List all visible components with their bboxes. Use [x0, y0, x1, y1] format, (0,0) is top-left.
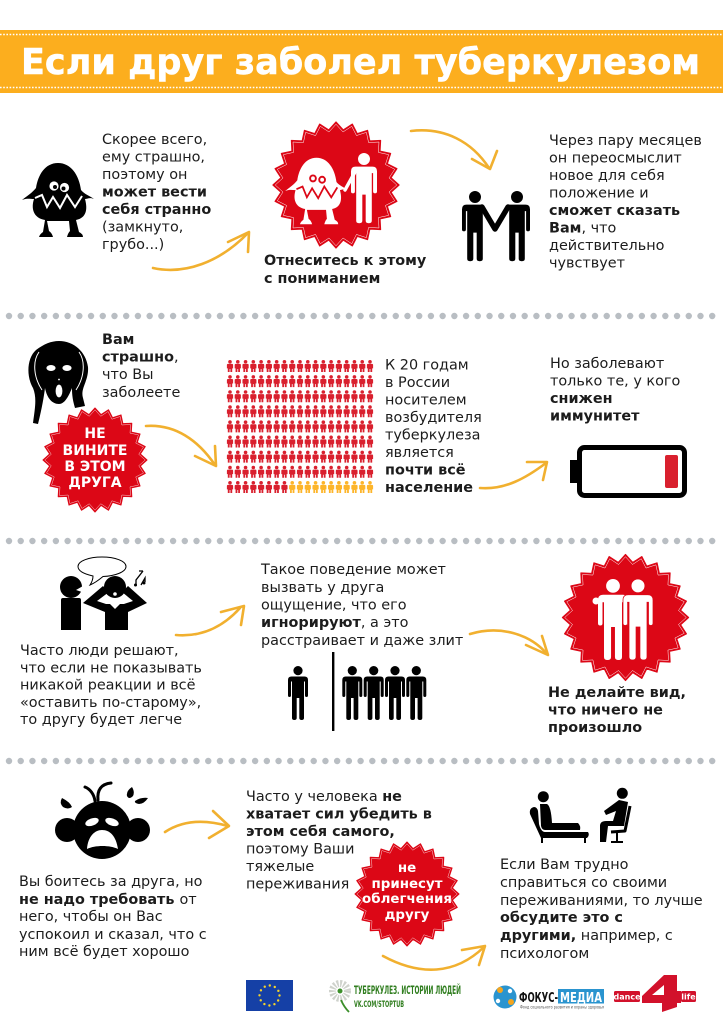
- arrow: to psychologist text: [383, 946, 485, 970]
- badge: do not blame: ДРУГА: [68, 475, 122, 491]
- callout: be understanding: Отнеситесь к этому: [264, 253, 427, 269]
- text: do not demand: ним всё будет хорошо: [19, 944, 190, 960]
- text: low immunity: Но заболевают: [550, 356, 664, 372]
- text: do not demand: успокоил и сказал, что с: [19, 927, 207, 943]
- panel: section 2, fear: [28, 332, 685, 512]
- text: after a few months: Через пару месяцев: [549, 133, 702, 149]
- text: discuss with others: другими, например, с: [500, 928, 673, 944]
- text: carriers in Russia: является: [385, 445, 454, 461]
- text: feeling ignored: вызвать у друга: [261, 580, 384, 596]
- badge: do not blame: [43, 408, 147, 512]
- footer logos: [246, 975, 696, 1012]
- text: you are afraid: заболеете: [102, 385, 180, 401]
- text: after a few months: действительно: [549, 238, 665, 254]
- badge: will not bring relief: облегчения: [362, 891, 452, 907]
- icon: two people holding hands: [462, 191, 530, 261]
- logo: Focus Media: [494, 986, 604, 1010]
- text: feeling ignored: расстраивает и даже злит: [261, 633, 463, 649]
- text: low immunity: только те, у кого: [550, 374, 680, 390]
- text: discuss with others: справиться со своими: [500, 875, 667, 891]
- text: feeling ignored: ощущение, что его: [261, 598, 407, 614]
- text: carriers in Russia: носителем: [385, 392, 467, 408]
- panel: section 1, understanding: [22, 122, 706, 287]
- text: carriers in Russia: население: [385, 480, 473, 496]
- text: not enough strength: тяжелые: [246, 859, 314, 875]
- arrow: to do not pretend badge: [470, 631, 548, 655]
- logo: Focus Media: ФОКУС-: [519, 991, 558, 1006]
- text: not enough strength: Часто у человека не: [246, 789, 402, 805]
- badge: do not blame: НЕ: [84, 426, 106, 442]
- logo: TB stories daisy: VK.COM/STOPTUB: [354, 1000, 404, 1010]
- icon: scream face: [28, 341, 88, 424]
- badge: do not blame: В ЭТОМ: [64, 459, 126, 475]
- text: low immunity: иммунитет: [550, 408, 640, 424]
- text: feeling ignored: Такое поведение может: [260, 562, 446, 578]
- text: feeling ignored: игнорируют, а это: [261, 615, 408, 631]
- badge: will not bring relief: другу: [385, 908, 430, 923]
- text: do not demand: Вы боитесь за друга, но: [19, 874, 203, 890]
- text: probably scared: себя странно: [102, 202, 211, 218]
- text: discuss with others: Если Вам трудно: [500, 857, 629, 873]
- title banner: Если друг заболел туберкулезом: [21, 42, 700, 83]
- callout: do not pretend: Не делайте вид,: [548, 685, 686, 701]
- text: carriers in Russia: туберкулеза: [385, 428, 480, 444]
- text: people decide: никакой реакции и всё: [20, 678, 196, 694]
- chart: population pictogram grid: [227, 360, 373, 493]
- icon: crying baby: [55, 783, 150, 859]
- text: do not demand: него, чтобы он Вас: [19, 909, 163, 925]
- text: you are afraid: Вам: [102, 332, 134, 348]
- badge: monster and person: [273, 122, 399, 248]
- arrow: to population grid: [146, 426, 216, 466]
- text: low immunity: снижен: [550, 391, 613, 407]
- logo: dance4life: [614, 975, 696, 1012]
- text: people decide: Часто люди решают,: [20, 643, 179, 659]
- text: discuss with others: психологом: [500, 946, 589, 962]
- badge: will not bring relief: не: [398, 861, 416, 876]
- text: carriers in Russia: в России: [385, 375, 450, 391]
- text: not enough strength: хватает сил убедить в: [246, 806, 432, 822]
- text: after a few months: положение и: [549, 186, 649, 202]
- text: you are afraid: страшно,: [102, 350, 179, 366]
- badge: will not bring relief: принесут: [372, 877, 443, 892]
- logo: dance4life: dance: [614, 992, 641, 1002]
- text: carriers in Russia: почти всё: [385, 462, 466, 478]
- text: after a few months: чувствует: [549, 256, 625, 272]
- text: not enough strength: этом себя самого,: [246, 824, 395, 840]
- text: after a few months: сможет сказать: [549, 203, 680, 219]
- text: not enough strength: поэтому Ваши: [246, 842, 354, 858]
- logo: TB stories daisy: ТУБЕРКУЛЕЗ. ИСТОРИИ ЛЮДЕЙ: [354, 982, 461, 997]
- logo: Focus Media: Фонд социального развития и охраны здоровья: [520, 1004, 604, 1010]
- text: probably scared: поэтому он: [102, 167, 187, 183]
- logo: EU flag: [246, 980, 293, 1011]
- panel: section 4, talk about it: [19, 783, 707, 970]
- text: carriers in Russia: возбудителя: [385, 410, 482, 426]
- text: people decide: то другу будет легче: [20, 712, 182, 728]
- text: people decide: «оставить по-старому»,: [20, 695, 201, 711]
- text: after a few months: Вам, что: [549, 220, 616, 236]
- text: probably scared: Скорее всего,: [102, 132, 207, 148]
- text: discuss with others: переживаниями, то лучше: [500, 893, 703, 909]
- logo: Focus Media: МЕДИА: [560, 991, 602, 1006]
- text: after a few months: новое для себя: [549, 168, 665, 184]
- text: people decide: что если не показывать: [20, 660, 202, 676]
- text: carriers in Russia: К 20 годам: [385, 358, 469, 374]
- icon: person ignoring speaker: [60, 557, 147, 630]
- text: probably scared: грубо...): [102, 237, 164, 253]
- text: discuss with others: обсудите это с: [500, 910, 623, 926]
- callout: do not pretend: произошло: [548, 720, 642, 736]
- callout: do not pretend: что ничего не: [548, 702, 663, 718]
- icon: low battery: [570, 448, 684, 496]
- badge: two people: [562, 554, 688, 680]
- logo: dance4life: life: [681, 992, 696, 1002]
- badge: do not blame: ВИНИТЕ: [63, 443, 127, 459]
- text: probably scared: (замкнуто,: [102, 220, 183, 236]
- title banner: [0, 30, 723, 93]
- badge: will not bring relief: [355, 842, 459, 946]
- callout: be understanding: с пониманием: [264, 271, 380, 287]
- text: do not demand: не надо требовать от: [19, 892, 197, 908]
- arrow: to holding hands: [411, 130, 497, 169]
- text: after a few months: он переосмыслит: [549, 150, 682, 166]
- text: probably scared: ему страшно,: [102, 150, 205, 166]
- arrow: to understanding badge: [153, 232, 249, 270]
- icon: black monster: [22, 163, 94, 237]
- text: probably scared: может вести: [102, 184, 207, 200]
- icon: patient and psychologist: [530, 788, 630, 843]
- icon: one person apart from group: [288, 652, 426, 731]
- text: not enough strength: переживания: [246, 876, 349, 892]
- arrow: to middle text: [165, 811, 229, 838]
- logo: TB stories daisy: [332, 982, 461, 1012]
- panel: section 3, ignoring: [20, 554, 691, 736]
- text: you are afraid: что Вы: [102, 367, 154, 383]
- arrow: to battery: [480, 462, 547, 488]
- arrow: to ignored text: [176, 606, 244, 635]
